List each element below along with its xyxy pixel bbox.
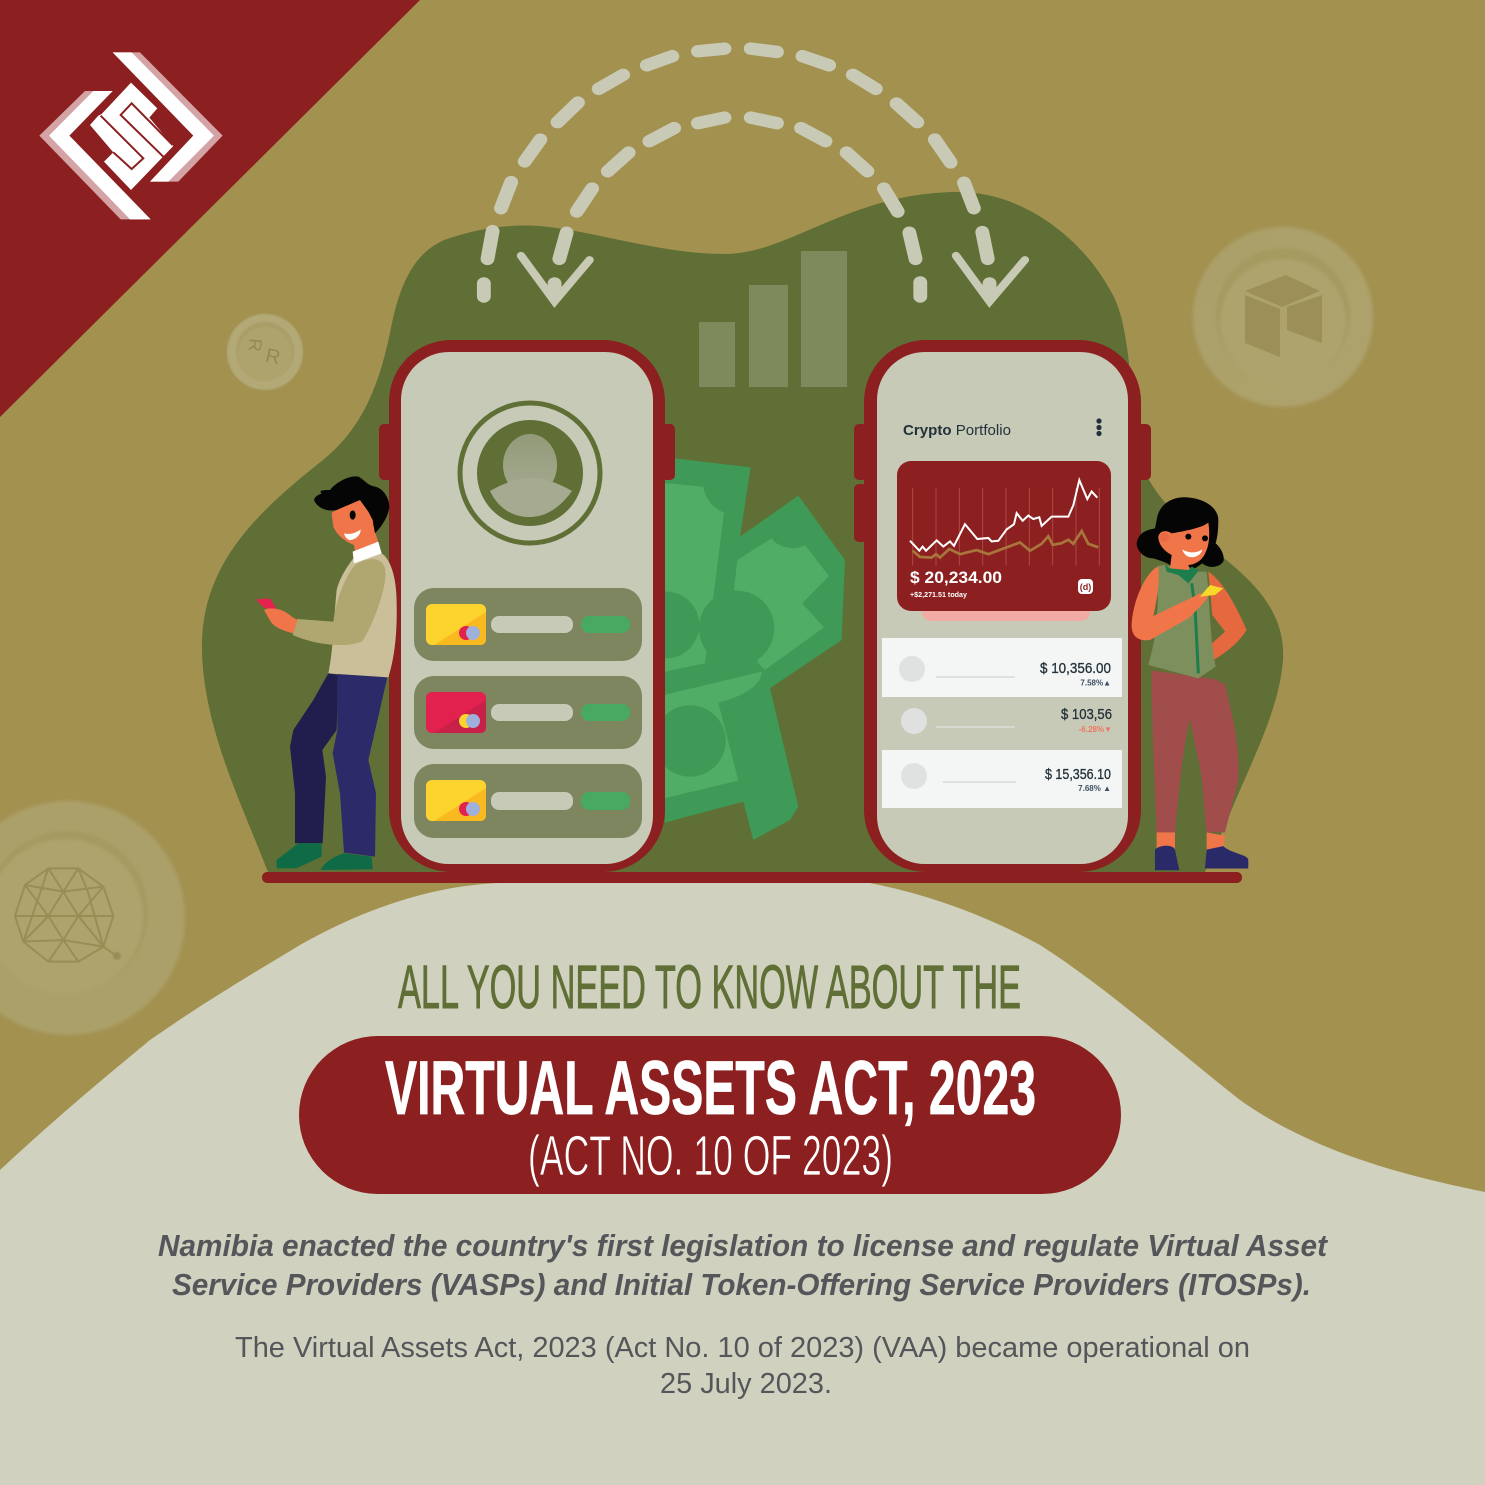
intro text: Service Providers (VASPs) and Initial Token-Offering Service Providers (ITOSPs). (172, 1267, 1311, 1302)
body text (235, 1332, 1250, 1400)
asset row 1 (882, 638, 1122, 697)
green blob (202, 192, 1283, 872)
portfolio chart card: +$2,271.51 today (910, 590, 968, 599)
card row 2 (414, 676, 642, 749)
subtitle: (ACT NO. 10 OF 2023) (528, 1124, 893, 1188)
intro text: Namibia enacted the country's first legislation to license and regulate Virtual Asset (158, 1228, 1329, 1263)
card row 1 (414, 588, 642, 661)
asset row 2 (901, 707, 1112, 734)
asset row 3: 7.68% ▲ (1078, 784, 1111, 793)
intro text (158, 1228, 1329, 1302)
coin: large right (1193, 227, 1373, 407)
title pill (299, 1036, 1121, 1194)
menu dots (1096, 418, 1102, 436)
card row 3 (414, 764, 642, 838)
asset row 3 (882, 750, 1122, 808)
right phone (854, 340, 1151, 872)
portfolio chart card (897, 461, 1111, 621)
woman figure (1132, 497, 1248, 870)
profile avatar (460, 403, 600, 543)
asset row 1: $ 10,356.00 (1040, 661, 1111, 677)
money bills (665, 458, 845, 840)
asset row 2: -6.28%▼ (1079, 725, 1112, 734)
bar chart (699, 251, 847, 387)
body text: 25 July 2023. (660, 1368, 832, 1400)
portfolio chart card: $ 20,234.00 (910, 569, 1002, 587)
arrow: outer dashed arc (484, 49, 1025, 301)
coin: small left: R (263, 345, 282, 369)
coin: small left: R (244, 338, 266, 352)
asset row 1: 7.58%▲ (1080, 678, 1111, 688)
coin: small left (227, 314, 303, 390)
man figure (256, 476, 397, 870)
arrow: inner dashed arc (559, 118, 920, 297)
light bottom hill (0, 883, 1485, 1485)
heading: all you need to know: ALL YOU NEED TO KNOW ABOUT THE (398, 953, 1021, 1021)
asset row 3: $ 15,356.10 (1045, 767, 1111, 783)
app heading: Crypto Portfolio (903, 422, 1011, 439)
coin: large bottom-left (0, 801, 185, 1035)
left phone (379, 340, 675, 872)
asset row 2: $ 103,56 (1061, 707, 1112, 723)
portfolio chart card: (d) (1080, 582, 1091, 592)
body text: The Virtual Assets Act, 2023 (Act No. 10 of 2023) (VAA) became operational on (235, 1332, 1250, 1364)
red corner banner (0, 0, 420, 417)
ground line (262, 872, 1242, 883)
title: VIRTUAL ASSETS ACT, 2023 (385, 1046, 1036, 1131)
logo (39, 52, 223, 219)
